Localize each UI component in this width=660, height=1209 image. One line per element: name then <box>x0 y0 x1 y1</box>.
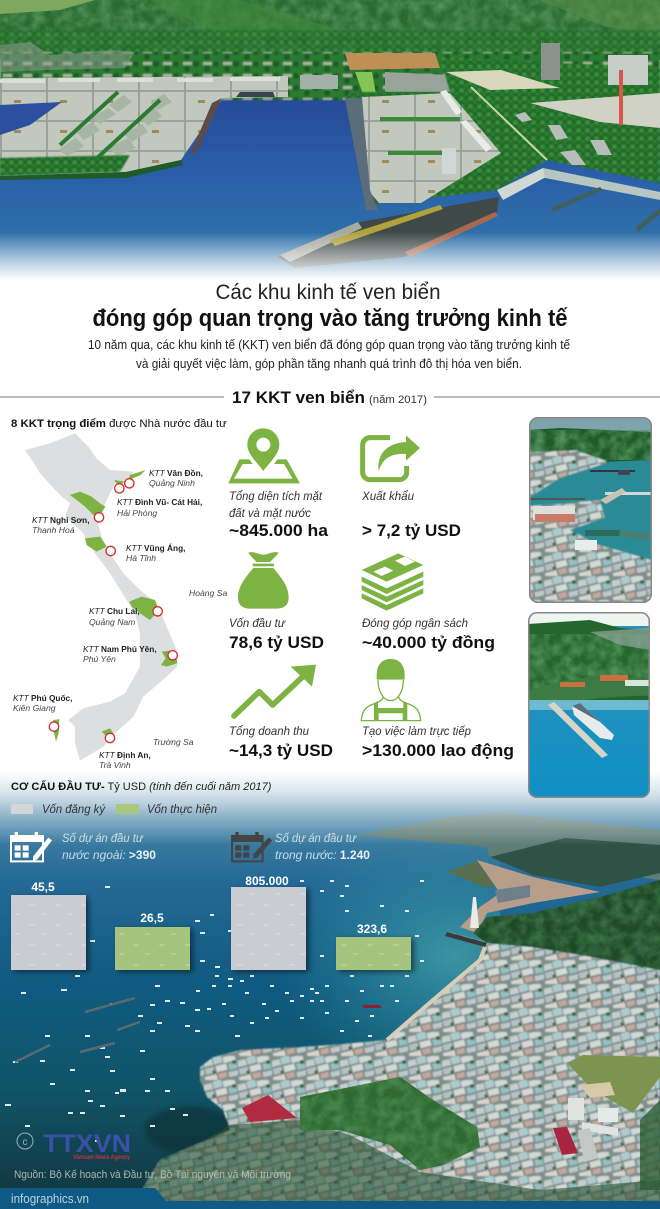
stat: export: > 7,2 tỷ USD <box>362 521 461 540</box>
bar: foreign implemented <box>115 911 190 970</box>
map labels: Hà Tĩnh <box>126 553 156 563</box>
logo: TTXVN <box>17 1130 131 1161</box>
photo: harbour town <box>529 417 652 603</box>
investment heading: CƠ CẤU ĐẦU TƯ- Tỷ USD (tính đến cuối năm 2017) <box>11 780 272 793</box>
map labels: Kiên Giang <box>13 703 56 713</box>
stats grid <box>228 428 514 760</box>
map labels: KTT Định An, <box>99 750 151 760</box>
stat: area <box>229 489 329 540</box>
title: Các khu kinh tế ven biển <box>216 281 440 304</box>
map labels: KTT Vân Đồn, <box>149 468 203 478</box>
text: foreign projects: nước ngoài: >390 <box>62 848 156 862</box>
intro text: 10 năm qua, các khu kinh tế (KKT) ven biển đã đóng góp quan trọng vào tăng trưởng kinh tế <box>88 338 570 352</box>
boats <box>5 880 424 1142</box>
map labels: Hải Phòng <box>117 508 157 518</box>
stat: budget: Đóng góp ngân sách <box>362 616 468 630</box>
map land shape <box>25 433 177 761</box>
logo: TTXVN: c <box>22 1137 28 1148</box>
icon: worker <box>361 659 421 721</box>
source: Nguồn: Bộ Kế hoạch và Đầu tư, Bộ Tài nguyên và Môi trường <box>14 1169 291 1181</box>
bar: foreign registered: 45,5 <box>31 880 55 894</box>
stat: jobs: Tạo việc làm trực tiếp <box>362 724 471 738</box>
site markers <box>49 479 177 743</box>
highlighted provinces <box>53 470 177 742</box>
stat: investment <box>229 616 324 652</box>
stat: area: Tổng diện tích mặt <box>229 489 323 503</box>
bar chart: investment <box>11 874 411 970</box>
map of Vietnam <box>13 433 227 770</box>
stat: export: Xuất khẩu <box>361 489 414 503</box>
map labels: Quảng Nam <box>89 617 135 627</box>
logo: TTXVN: TTXVN <box>43 1130 131 1158</box>
map heading: 8 KKT trọng điểm được Nhà nước đầu tư <box>11 418 227 430</box>
icon: banknotes <box>362 553 423 611</box>
icon: export arrow <box>363 435 420 480</box>
icon: money bag <box>238 552 289 609</box>
map labels: Quảng Ninh <box>149 478 195 488</box>
legend: Vốn đăng ký <box>42 802 106 816</box>
title: đóng góp quan trọng vào tăng trưởng kinh tế <box>92 305 568 332</box>
bar: foreign registered <box>11 880 86 970</box>
stat: revenue <box>229 724 333 760</box>
stat: budget: ~40.000 tỷ đồng <box>362 633 495 652</box>
photo: coastal town background <box>0 770 660 1209</box>
stat: area: ~845.000 ha <box>229 521 329 540</box>
stat: investment: 78,6 tỷ USD <box>229 633 324 652</box>
stat: area: đất và mặt nước <box>229 506 311 520</box>
icon: map pin <box>228 428 300 483</box>
map labels: Thanh Hoá <box>32 525 75 535</box>
legend: Vốn thực hiện <box>147 802 217 816</box>
bar: domestic implemented <box>336 922 411 970</box>
map labels: KTT Nam Phú Yên, <box>83 644 157 654</box>
map labels: Hoàng Sa <box>189 588 227 598</box>
photo: seaport aerial view <box>0 0 660 280</box>
intro text <box>88 338 570 371</box>
map labels <box>13 468 227 770</box>
bar: domestic registered <box>231 874 306 970</box>
map labels: KTT Nghi Sơn, <box>32 515 90 525</box>
bar: domestic implemented: 323,6 <box>357 922 387 936</box>
map labels: Trường Sa <box>153 737 194 747</box>
footer bar: infographics.vn <box>11 1191 89 1206</box>
stat: revenue: ~14,3 tỷ USD <box>229 741 333 760</box>
bar: foreign implemented: 26,5 <box>140 911 164 925</box>
map labels: Trà Vinh <box>99 760 131 770</box>
map labels: KTT Vũng Áng, <box>126 543 185 553</box>
text: foreign projects <box>62 831 156 862</box>
text: foreign projects: Số dự án đầu tư <box>62 831 144 845</box>
map labels: KTT Chu Lai, <box>89 606 140 616</box>
pier <box>278 197 499 268</box>
map labels: Phú Yên <box>83 654 116 664</box>
logo: TTXVN: Vietnam News Agency <box>73 1155 131 1161</box>
icon: calendar domestic <box>232 832 272 861</box>
legend <box>11 802 217 816</box>
stat: budget <box>362 616 495 652</box>
photo: cruise port <box>528 612 650 798</box>
text: domestic projects <box>275 831 370 862</box>
text: domestic projects: Số dự án đầu tư <box>275 831 357 845</box>
bar: domestic registered: 805.000 <box>245 874 289 888</box>
intro text: và giải quyết việc làm, góp phần tăng nhanh quá trình đô thị hóa ven biển. <box>136 357 522 371</box>
footer bar <box>0 1188 660 1209</box>
stat: jobs: >130.000 lao động <box>362 741 514 760</box>
stat: revenue: Tổng doanh thu <box>229 724 309 738</box>
section heading: 17 KKT: (năm 2017) <box>369 394 427 406</box>
left yard <box>0 76 288 176</box>
section heading: 17 KKT <box>0 388 660 407</box>
map labels: KTT Đình Vũ- Cát Hải, <box>117 497 202 507</box>
title <box>92 281 568 332</box>
text: domestic projects: trong nước: 1.240 <box>275 848 370 862</box>
section heading: 17 KKT: 17 KKT ven biển <box>232 388 365 407</box>
icon: rising arrow <box>234 665 316 716</box>
icon: calendar foreign <box>11 832 52 861</box>
map labels: KTT Phú Quốc, <box>13 693 72 703</box>
stat: investment: Vốn đầu tư <box>229 616 286 630</box>
right land <box>345 57 660 205</box>
stat: export <box>361 489 461 540</box>
stat: jobs <box>362 724 514 760</box>
